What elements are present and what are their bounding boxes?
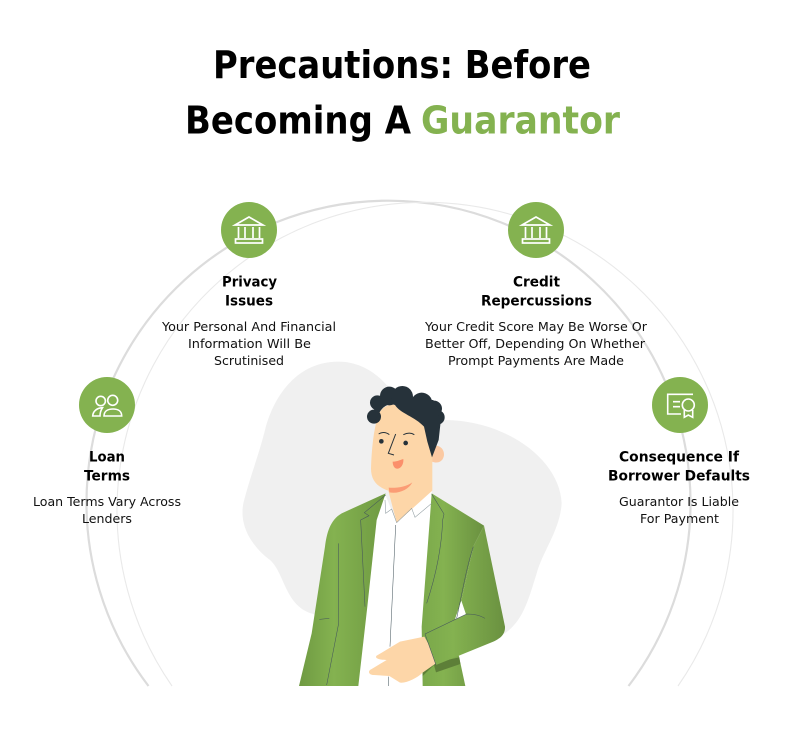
face and neck bbox=[371, 405, 432, 523]
panel: loan terms: Loan Terms Vary Across bbox=[33, 495, 181, 510]
panel: loan terms bbox=[33, 377, 181, 527]
panel: privacy issues: Information Will Be bbox=[188, 337, 311, 352]
panel: privacy issues: Issues bbox=[225, 294, 273, 310]
jacket right bbox=[422, 493, 484, 686]
sleeve bbox=[425, 526, 505, 665]
title: Becoming A bbox=[185, 98, 412, 142]
panel: credit repercussions: Credit bbox=[513, 274, 560, 290]
collar lines bbox=[385, 500, 432, 523]
title bbox=[185, 43, 620, 142]
shirt gap bbox=[455, 601, 466, 618]
icon: bank bbox=[221, 202, 277, 258]
clothing lines bbox=[319, 494, 485, 686]
sleeve shadow bbox=[423, 657, 460, 676]
jacket left bbox=[299, 493, 386, 686]
panel: credit repercussions: Your Credit Score May Be Worse Or bbox=[424, 320, 648, 335]
background blob bbox=[242, 362, 562, 647]
panel: consequence if borrower defaults: Guarantor Is Liable bbox=[619, 495, 739, 510]
panel: credit repercussions: Better Off, Depending On Whether bbox=[425, 337, 646, 352]
collar shadow bbox=[389, 482, 412, 493]
ear bbox=[432, 446, 444, 463]
panel: loan terms: Loan bbox=[89, 450, 125, 466]
panel: consequence if borrower defaults: Consequence If bbox=[619, 450, 740, 466]
title: Precautions: Before bbox=[213, 43, 591, 87]
panel: privacy issues bbox=[161, 202, 336, 369]
panel: consequence if borrower defaults bbox=[608, 377, 750, 527]
concentric arcs bbox=[86, 201, 733, 686]
character illustration bbox=[242, 362, 562, 686]
panel: consequence if borrower defaults: Borrower Defaults bbox=[608, 468, 750, 484]
panel: credit repercussions: Prompt Payments Are Made bbox=[448, 354, 624, 369]
panel: loan terms: Terms bbox=[84, 468, 130, 484]
panel: privacy issues: Privacy bbox=[222, 274, 277, 290]
facial features bbox=[379, 433, 414, 469]
panel: consequence if borrower defaults: For Payment bbox=[640, 512, 719, 527]
hair bbox=[367, 386, 445, 457]
shirt bbox=[358, 491, 437, 686]
panel: loan terms: Lenders bbox=[82, 512, 132, 527]
panel: privacy issues: Your Personal And Financial bbox=[161, 320, 336, 335]
hand bbox=[369, 637, 438, 683]
panel: privacy issues: Scrutinised bbox=[214, 354, 284, 369]
icon: bank bbox=[508, 202, 564, 258]
panel: credit repercussions: Repercussions bbox=[481, 294, 592, 310]
icon: certificate bbox=[652, 377, 708, 433]
title: Guarantor bbox=[421, 98, 620, 142]
panel: credit repercussions bbox=[424, 202, 648, 369]
icon: people bbox=[79, 377, 135, 433]
